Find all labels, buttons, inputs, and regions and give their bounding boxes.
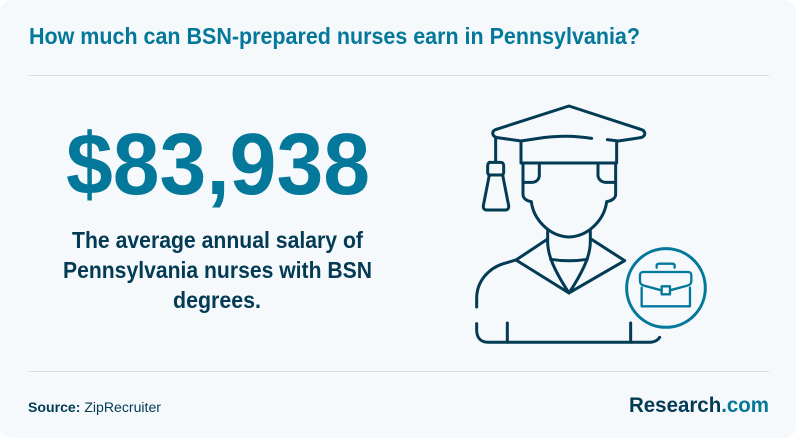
salary description: The average annual salary of [72, 227, 363, 253]
salary description: Pennsylvania nurses with BSN [63, 257, 372, 283]
icon: graduate with briefcase [477, 106, 705, 342]
icon: briefcase badge [627, 249, 705, 327]
salary description: degrees. [173, 287, 261, 313]
title: How much can BSN-prepared nurses earn in Pennsylvania? [29, 23, 640, 49]
logo: Research.com: Research.com [629, 394, 769, 417]
source note: Source: ZipRecruiter [28, 400, 162, 415]
icon: graduate [477, 106, 660, 342]
salary figure: $83,938 [66, 116, 370, 213]
salary description [63, 227, 372, 313]
